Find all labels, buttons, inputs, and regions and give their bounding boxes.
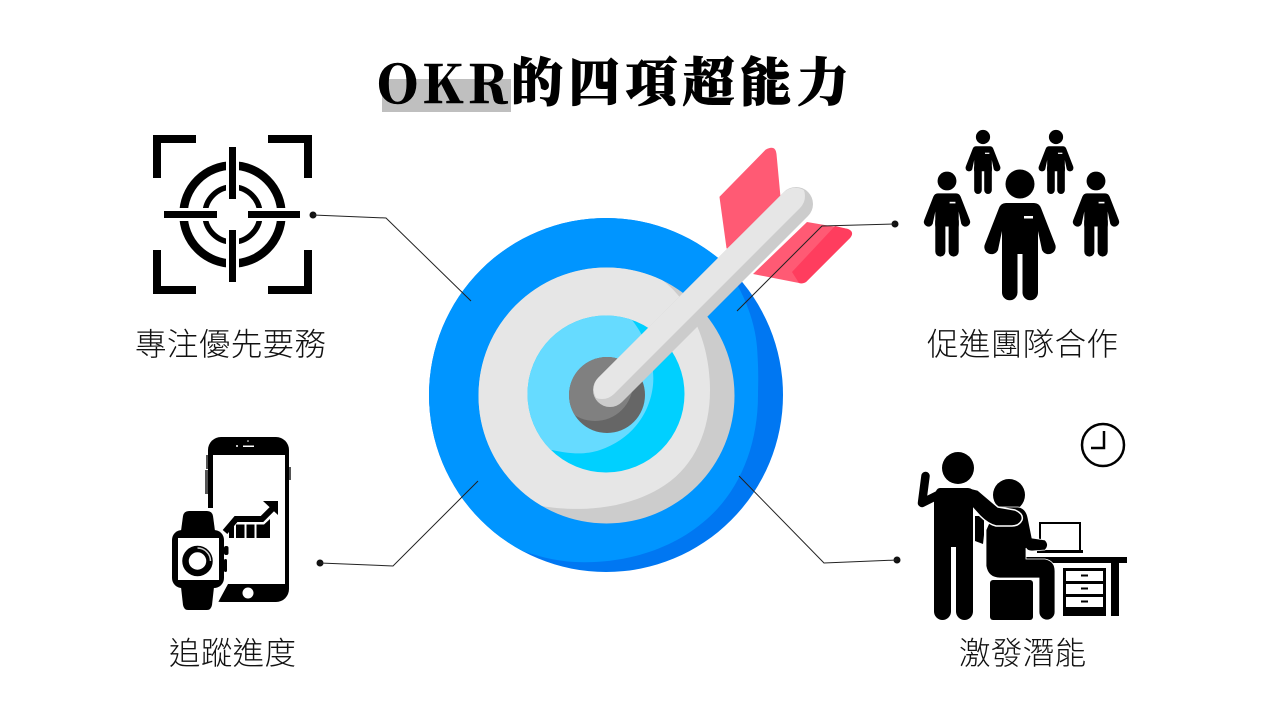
growth chart	[225, 501, 278, 538]
connector: motivate	[739, 476, 900, 564]
target middle ring	[478, 268, 734, 524]
target inner ring	[528, 316, 684, 472]
arrow fletching lower	[753, 222, 852, 283]
clock	[1082, 424, 1124, 466]
title	[377, 41, 849, 118]
desk	[1025, 557, 1127, 616]
title highlight	[382, 79, 511, 112]
connector: focus	[310, 212, 471, 301]
label: focus: 專注優先要務	[135, 326, 326, 362]
target outer ring	[429, 218, 783, 572]
arrow fletching upper	[720, 148, 780, 248]
phone	[200, 437, 291, 608]
icon: coaching at desk	[922, 424, 1127, 620]
standing person	[922, 452, 1022, 620]
central target with arrow	[400, 148, 852, 572]
label: motivate: 激發潛能	[959, 635, 1086, 671]
title text: Chinese: 的四項超能力	[511, 41, 849, 116]
icon: crosshair focus	[153, 135, 312, 294]
label: tracking: 追蹤進度	[169, 635, 296, 671]
seated person	[975, 479, 1055, 620]
connector: team	[737, 220, 898, 311]
label: team: 促進團隊合作	[927, 326, 1118, 362]
arrow shaft	[602, 196, 796, 390]
icon: phone and watch tracking	[170, 437, 291, 610]
watch	[170, 511, 228, 610]
title text: OKR: OKR	[377, 43, 508, 118]
icon: team of people	[924, 130, 1119, 300]
target bullseye	[569, 357, 645, 433]
laptop	[1037, 523, 1083, 553]
connector: tracking	[316, 481, 478, 566]
